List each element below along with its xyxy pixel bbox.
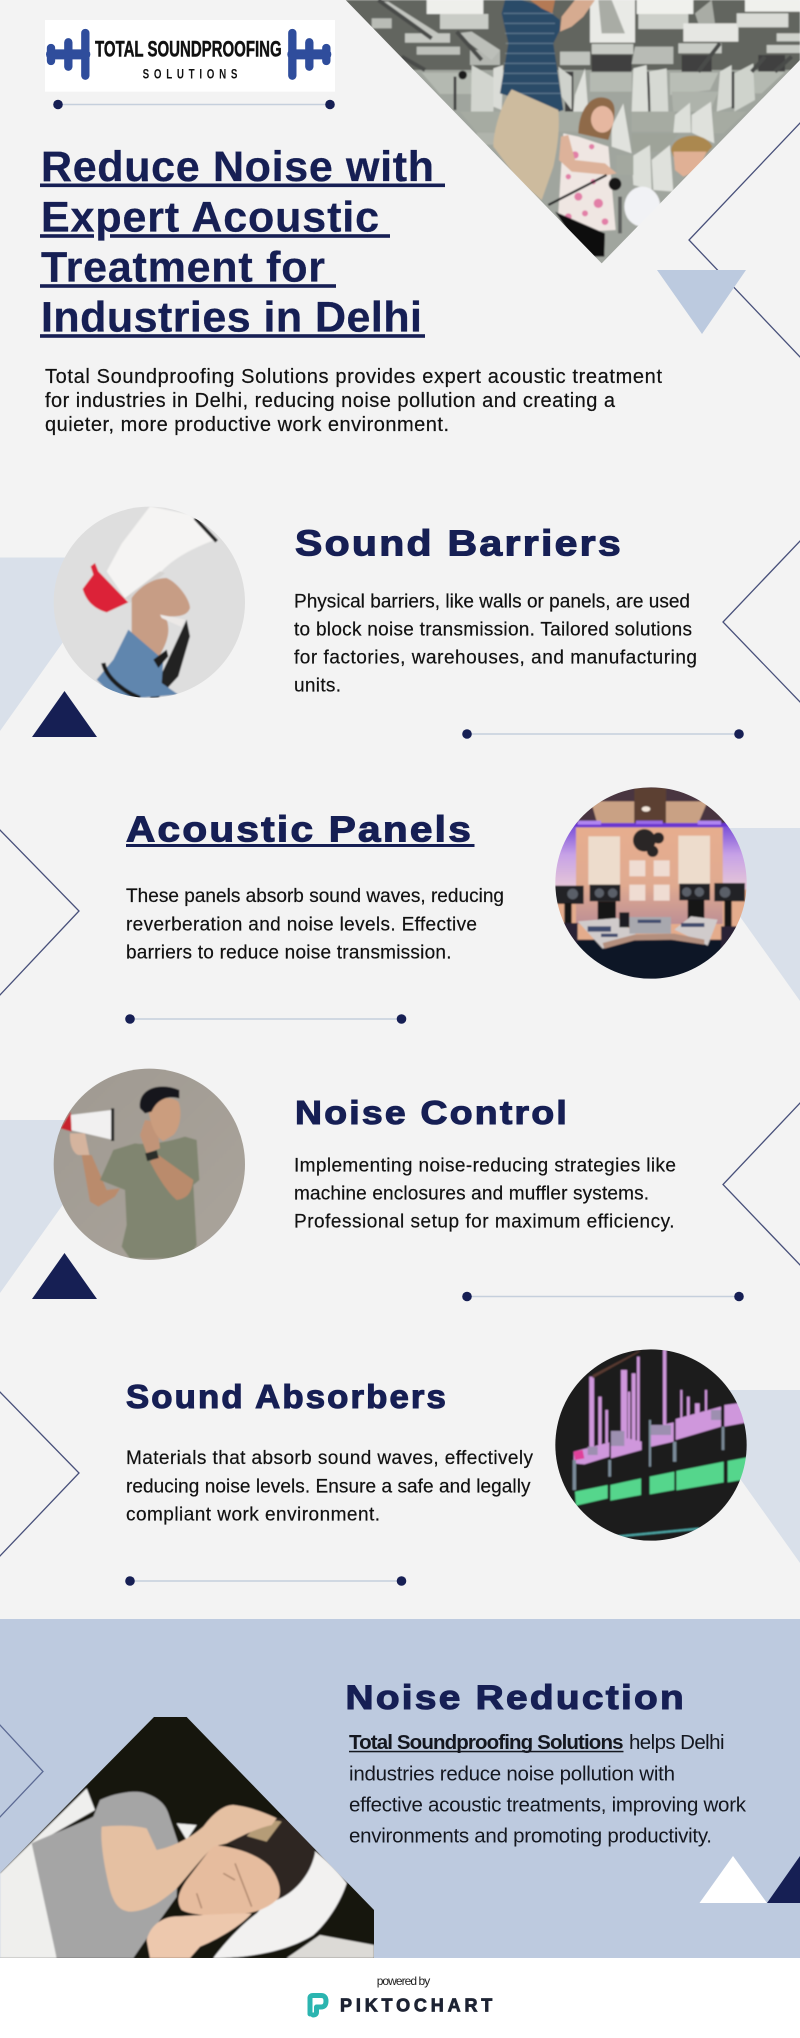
chevron: top right [689, 122, 800, 358]
piktochart wordmark: PIKTOCHART [340, 1996, 492, 2016]
title: Reduce Noise with [41, 143, 434, 191]
intro text: quieter, more productive work environment. [45, 414, 449, 436]
body text [126, 886, 504, 964]
body text: compliant work environment. [126, 1504, 380, 1526]
body text [294, 1156, 676, 1232]
pale background shape [677, 828, 800, 1001]
panel: sound absorbers [0, 1345, 800, 1586]
man two [671, 136, 712, 157]
panel: acoustic panels [0, 783, 800, 1024]
intro text: Total Soundproofing Solutions provides expert acoustic treatment [45, 366, 662, 388]
pale background shape [0, 558, 123, 731]
body text: reverberation and noise levels. Effective [126, 914, 477, 936]
panel: noise control [0, 1065, 800, 1301]
divider [125, 1576, 406, 1586]
photo: recording studio [551, 783, 751, 983]
triangle: white [700, 1856, 767, 1903]
body text [349, 1731, 747, 1848]
icon: left sound wave [51, 33, 85, 76]
chevron [0, 829, 79, 996]
hair [227, 1818, 315, 1900]
intro text: for industries in Delhi, reducing noise pollution and creating a [45, 390, 616, 412]
body text: Implementing noise-reducing strategies like [294, 1156, 676, 1176]
body text: units. [294, 676, 341, 696]
triangle: pale blue [657, 270, 746, 334]
chevron [723, 1102, 800, 1266]
title [40, 143, 445, 342]
photo: woman covering ears in bed [0, 1710, 380, 1960]
body text: Materials that absorb sound waves, effectively [126, 1448, 534, 1469]
intro text [45, 366, 662, 436]
lower forearm [147, 1913, 252, 1958]
icon: right sound wave [292, 33, 326, 76]
face [179, 1845, 280, 1915]
powered by label: powered by [377, 1974, 430, 1988]
triangle: navy [32, 691, 97, 737]
icon: piktochart mark [310, 1996, 326, 2015]
title: Treatment for [41, 244, 325, 292]
upper arm and hand [101, 1805, 277, 1912]
pale background shape [677, 1390, 800, 1563]
body text: Total Soundproofing Solutions [349, 1731, 624, 1754]
pillow [213, 1850, 347, 1958]
body text: for factories, warehouses, and manufacturing [294, 648, 697, 668]
heading: Noise Reduction [346, 1679, 686, 1717]
heading: Sound Absorbers [126, 1378, 448, 1415]
photo: anechoic chamber triangle [345, 0, 800, 270]
triangle: navy [767, 1856, 800, 1903]
triangle: navy [32, 1253, 97, 1299]
body text: effective acoustic treatments, improving work [349, 1794, 747, 1817]
panel: noise reduction [0, 1619, 800, 1960]
logo [45, 20, 335, 92]
heading underline [126, 844, 474, 847]
panel background [0, 1619, 800, 1958]
heading: Sound Barriers [295, 522, 623, 564]
heading: Noise Control [295, 1094, 569, 1131]
title: Industries in Delhi [41, 294, 422, 342]
logo wordmark: TOTAL SOUNDPROOFING [95, 37, 282, 62]
bedding left [0, 1788, 95, 1958]
body text: Professional setup for maximum efficiency. [294, 1212, 674, 1232]
body text: machine enclosures and muffler systems. [294, 1184, 649, 1204]
heading: Acoustic Panels [126, 808, 473, 850]
divider [462, 1292, 744, 1301]
photo: man with megaphone [50, 1065, 250, 1265]
woman [578, 97, 615, 140]
body text: barriers to reduce noise transmission. [126, 942, 452, 964]
divider: logo [53, 100, 335, 109]
body text [294, 592, 697, 696]
body text: reducing noise levels. Ensure a safe and legally [126, 1476, 531, 1498]
divider [462, 729, 744, 739]
chevron [723, 540, 800, 703]
bed under [287, 1935, 374, 1958]
photo: hand holding megaphone [50, 503, 250, 703]
chevron [0, 1724, 43, 1818]
body text: Physical barriers, like walls or panels, are used [294, 592, 690, 612]
shirt [32, 1792, 178, 1958]
chevron [0, 1391, 79, 1557]
logo subtitle: SOLUTIONS [143, 66, 237, 82]
body text [126, 1448, 534, 1526]
dark gaps [565, 55, 785, 112]
body text: These panels absorb sound waves, reducing [126, 886, 504, 907]
body text: to block noise transmission. Tailored solutions [294, 620, 692, 640]
body text: helps Delhi [629, 1731, 724, 1754]
footer: piktochart branding [0, 1958, 800, 2038]
man [500, 0, 563, 112]
panel: sound barriers [0, 503, 800, 739]
body text: industries reduce noise pollution with [349, 1763, 675, 1786]
pale background shape [0, 1120, 123, 1293]
photo: audio editing timeline [551, 1345, 751, 1545]
body text: environments and promoting productivity. [349, 1825, 712, 1848]
divider [125, 1014, 406, 1024]
title: Expert Acoustic [41, 194, 379, 242]
